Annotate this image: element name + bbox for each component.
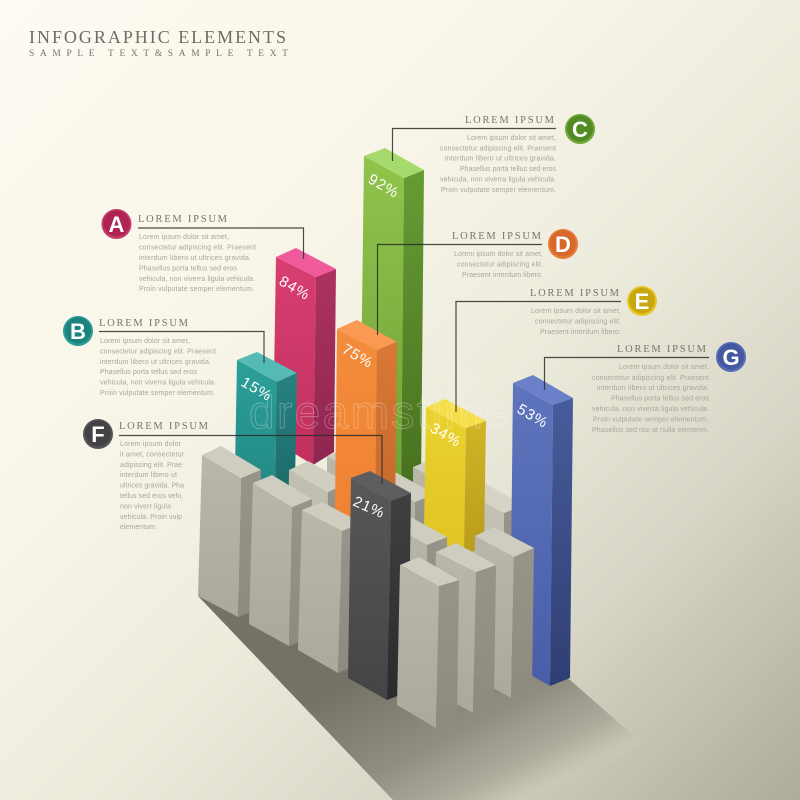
- text block C: interdum libero ut ultrices gravida.: [445, 156, 556, 162]
- text block E: [530, 288, 621, 336]
- text block D: Lorem ipsum dolor sit amet,: [454, 251, 543, 258]
- text block D: [452, 231, 543, 279]
- text block G: consectetur adipiscing elit. Praesent: [592, 375, 709, 382]
- badge G: G: [722, 345, 740, 370]
- grey bar back 3: [413, 459, 473, 570]
- text block C: Phasellus porta tellus sed eros: [460, 166, 556, 173]
- heading E: LOREM IPSUM: [530, 288, 620, 299]
- text block A: interdum libero ut ultrices gravida.: [139, 255, 251, 262]
- badge B: [63, 316, 93, 346]
- badge E: E: [635, 289, 649, 314]
- subtitle: SAMPLE TEXT&SAMPLE TEXT: [29, 49, 288, 59]
- bar D orange 75%: [335, 320, 397, 533]
- heading A: LOREM IPSUM: [138, 214, 228, 225]
- text block F: elementum.: [120, 524, 157, 531]
- text block G: [592, 344, 710, 434]
- badge C: [565, 114, 595, 144]
- text block F: non viverr ligula: [120, 504, 171, 510]
- bar B teal 15%: [235, 352, 297, 492]
- text block A: [138, 214, 256, 293]
- text block F: vehicula. Proin vulp: [120, 514, 182, 521]
- leader G: [544, 358, 709, 390]
- text block E: Lorem ipsum dolor sit amet,: [531, 308, 621, 315]
- heading D: LOREM IPSUM: [452, 231, 542, 242]
- text block A: Phasellus porta tellus sed eros: [139, 266, 238, 272]
- label 15%: 15%: [238, 374, 275, 405]
- percent labels: [238, 171, 551, 522]
- text block F: tellus sed eros vehi,: [120, 493, 183, 500]
- leader D: [378, 244, 542, 335]
- text block G: interdum libero ut ultrices gravida.: [597, 385, 709, 392]
- grey bar front 5: [433, 543, 496, 713]
- badge G: [716, 342, 746, 372]
- grey bar front 1: [198, 446, 261, 617]
- leader C: [392, 128, 556, 161]
- leader B: [99, 332, 264, 363]
- grey bar back 4: [375, 472, 435, 590]
- leader E: [456, 302, 621, 412]
- text block A: Proin vulputate semper elementum.: [139, 286, 254, 293]
- text block F: it amet, consectetur: [120, 452, 185, 458]
- heading B: LOREM IPSUM: [99, 318, 189, 329]
- badge F: [83, 419, 113, 449]
- text block B: Phasellus porta tellus sed eros: [100, 369, 198, 376]
- text block A: Lorem ipsum dolor sit amet,: [139, 234, 229, 241]
- text block B: interdum libero ut ultrices gravida.: [100, 359, 211, 366]
- label 21%: 21%: [350, 493, 387, 522]
- text block E: Praesent interdum libero.: [540, 329, 621, 336]
- text block G: vehicula, non viverra ligula vehicula.: [592, 406, 709, 413]
- text block C: Lorem ipsum dolor sit amet,: [467, 135, 556, 142]
- text block F: adipiscing elit. Prae: [120, 462, 182, 469]
- badge C: C: [572, 117, 588, 142]
- text block D: Praesent interdum libero.: [462, 272, 543, 279]
- text block A: vehicula, non viverra ligula vehicula.: [139, 276, 255, 283]
- text block F: ultrices gravida. Pha: [120, 482, 184, 490]
- title: [29, 27, 288, 59]
- label 92%: 92%: [365, 171, 402, 202]
- watermark: dreamstime: [249, 386, 511, 438]
- grey bar back 2: [288, 461, 348, 580]
- label 75%: 75%: [339, 341, 376, 372]
- leader lines: [99, 128, 709, 484]
- grey bar front 3: [298, 502, 362, 673]
- text block E: consectetur adipiscing elit.: [535, 318, 621, 326]
- heading C: LOREM IPSUM: [465, 115, 555, 126]
- bar E yellow 34%: [424, 399, 486, 555]
- badge A: A: [109, 212, 125, 237]
- badge F: F: [91, 422, 105, 447]
- label 34%: 34%: [427, 420, 464, 451]
- text block B: consectetur adipiscing elit. Praesent: [100, 348, 216, 356]
- text block B: Proin vulputate semper elementum.: [100, 390, 215, 397]
- bar G blue 53%: [510, 375, 573, 686]
- label 53%: 53%: [514, 401, 551, 432]
- cast shadow: [198, 596, 700, 800]
- grey bar front 4: [397, 557, 459, 728]
- text block F: interdum libero ut: [120, 472, 177, 479]
- text block B: Lorem ipsum dolor sit amet,: [100, 338, 190, 345]
- text block C: [440, 115, 556, 194]
- grey bar back 1: [327, 448, 387, 570]
- text block F: [119, 421, 209, 531]
- text block G: Phasellus porta tellus sed eros: [611, 396, 710, 402]
- grey bar front 6: [472, 527, 534, 698]
- label 84%: 84%: [276, 273, 313, 304]
- text block G: Proin vulputate semper elementum.: [593, 416, 709, 424]
- badge D: [548, 229, 578, 259]
- bar C green 92%: [360, 148, 424, 492]
- leader A: [138, 228, 304, 259]
- text block D: consectetur adipiscing elit.: [457, 262, 543, 268]
- text block C: vehicula, non viverra ligula vehicula.: [440, 176, 556, 184]
- badge A: [102, 209, 132, 239]
- grey bar front 2: [249, 475, 312, 646]
- badge D: D: [555, 232, 571, 257]
- grey bar mid: [387, 515, 447, 640]
- heading G: LOREM IPSUM: [617, 344, 707, 355]
- text block G: Lorem ipsum dolor sit amet,: [619, 364, 709, 371]
- text block B: vehicula, non viverra ligula vehicula.: [100, 380, 216, 386]
- bar A pink 84%: [273, 248, 336, 465]
- text block B: [99, 318, 216, 397]
- text block A: consectetur adipiscing elit. Praesent: [139, 244, 256, 252]
- badge E: [627, 286, 657, 316]
- text block C: Proin vulputate semper elementum.: [441, 187, 556, 194]
- text block C: consectetur adipiscing elit. Praesent: [440, 146, 556, 152]
- leader F: [119, 436, 382, 484]
- main title: INFOGRAPHIC ELEMENTS: [29, 27, 286, 47]
- heading F: LOREM IPSUM: [119, 421, 209, 432]
- text block G: Phasellus sed nisi at nulla elemenm.: [592, 427, 709, 434]
- text block F: Lorem ipsum dolor: [120, 441, 182, 448]
- bar F dark 21%: [348, 471, 411, 700]
- badge B: B: [70, 319, 86, 344]
- grey bar back 5: [464, 483, 524, 610]
